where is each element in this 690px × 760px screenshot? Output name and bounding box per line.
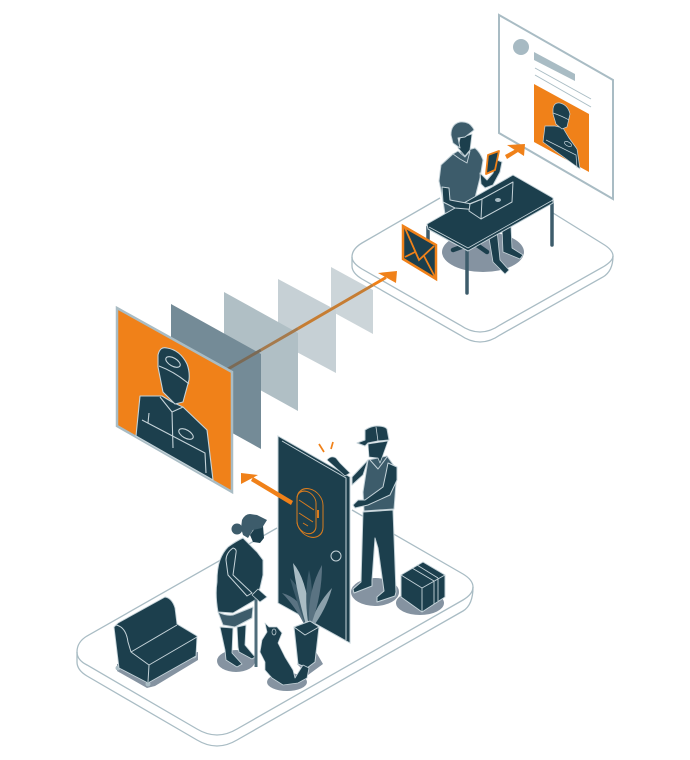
leaves — [282, 593, 308, 626]
sofa body — [114, 597, 197, 683]
woman legs and shoes — [220, 625, 255, 667]
sofa shadow — [117, 652, 198, 688]
cat ear detail — [272, 629, 276, 635]
door — [278, 436, 350, 643]
skirt — [218, 607, 253, 627]
sofa — [114, 597, 198, 688]
face — [368, 441, 388, 463]
woman shadow — [217, 650, 255, 672]
platform: upper office — [352, 198, 613, 342]
arm holding phone — [480, 160, 502, 188]
panel: notification card — [499, 15, 613, 199]
potted plant — [282, 563, 332, 675]
arrow: phone to notification — [505, 144, 525, 159]
cap — [357, 426, 389, 446]
lower arm — [353, 463, 397, 508]
face — [250, 526, 264, 543]
legs and shoes — [488, 227, 523, 274]
chair shadow — [442, 232, 524, 272]
man shadow — [351, 578, 399, 606]
knock marks — [319, 442, 333, 452]
card heading bar — [534, 52, 575, 81]
platform: lower entrance — [77, 510, 473, 746]
desk — [427, 175, 553, 293]
panel: enlarged face image — [117, 308, 232, 492]
smart doorbell — [297, 486, 323, 540]
person at desk — [427, 122, 553, 293]
parcel box — [396, 562, 445, 615]
laptop — [469, 182, 513, 219]
envelope icon — [403, 226, 436, 279]
cane — [254, 597, 258, 667]
raised arm — [352, 460, 368, 485]
torso — [439, 148, 483, 214]
cat body — [260, 623, 309, 685]
elderly woman — [216, 514, 267, 672]
pot rim — [294, 627, 319, 635]
forearm — [442, 187, 478, 210]
door knob — [331, 551, 341, 561]
sofa feet — [116, 654, 196, 686]
pot — [294, 621, 319, 668]
smartphone — [486, 151, 499, 174]
image frames receding — [171, 267, 373, 449]
delivery person portrait — [136, 348, 213, 480]
arrow: data transmission to office — [228, 271, 397, 369]
cap seam — [376, 427, 378, 441]
card photo — [534, 84, 589, 172]
hands — [252, 589, 267, 602]
cat — [260, 623, 309, 691]
chair feet — [453, 245, 487, 252]
pot shadow — [297, 652, 323, 675]
trousers and shoes — [353, 510, 396, 602]
hair bun — [232, 524, 242, 534]
vest — [363, 456, 397, 511]
coat arm line — [226, 548, 252, 596]
head — [451, 122, 474, 163]
avatar — [513, 39, 529, 55]
arrow: doorbell to image — [241, 473, 293, 505]
hair — [241, 514, 267, 538]
cat shadow — [267, 673, 307, 691]
coat — [216, 538, 263, 613]
hand knocking — [327, 457, 350, 476]
delivery man — [351, 426, 399, 606]
collar — [370, 457, 387, 469]
card text lines — [535, 68, 591, 107]
